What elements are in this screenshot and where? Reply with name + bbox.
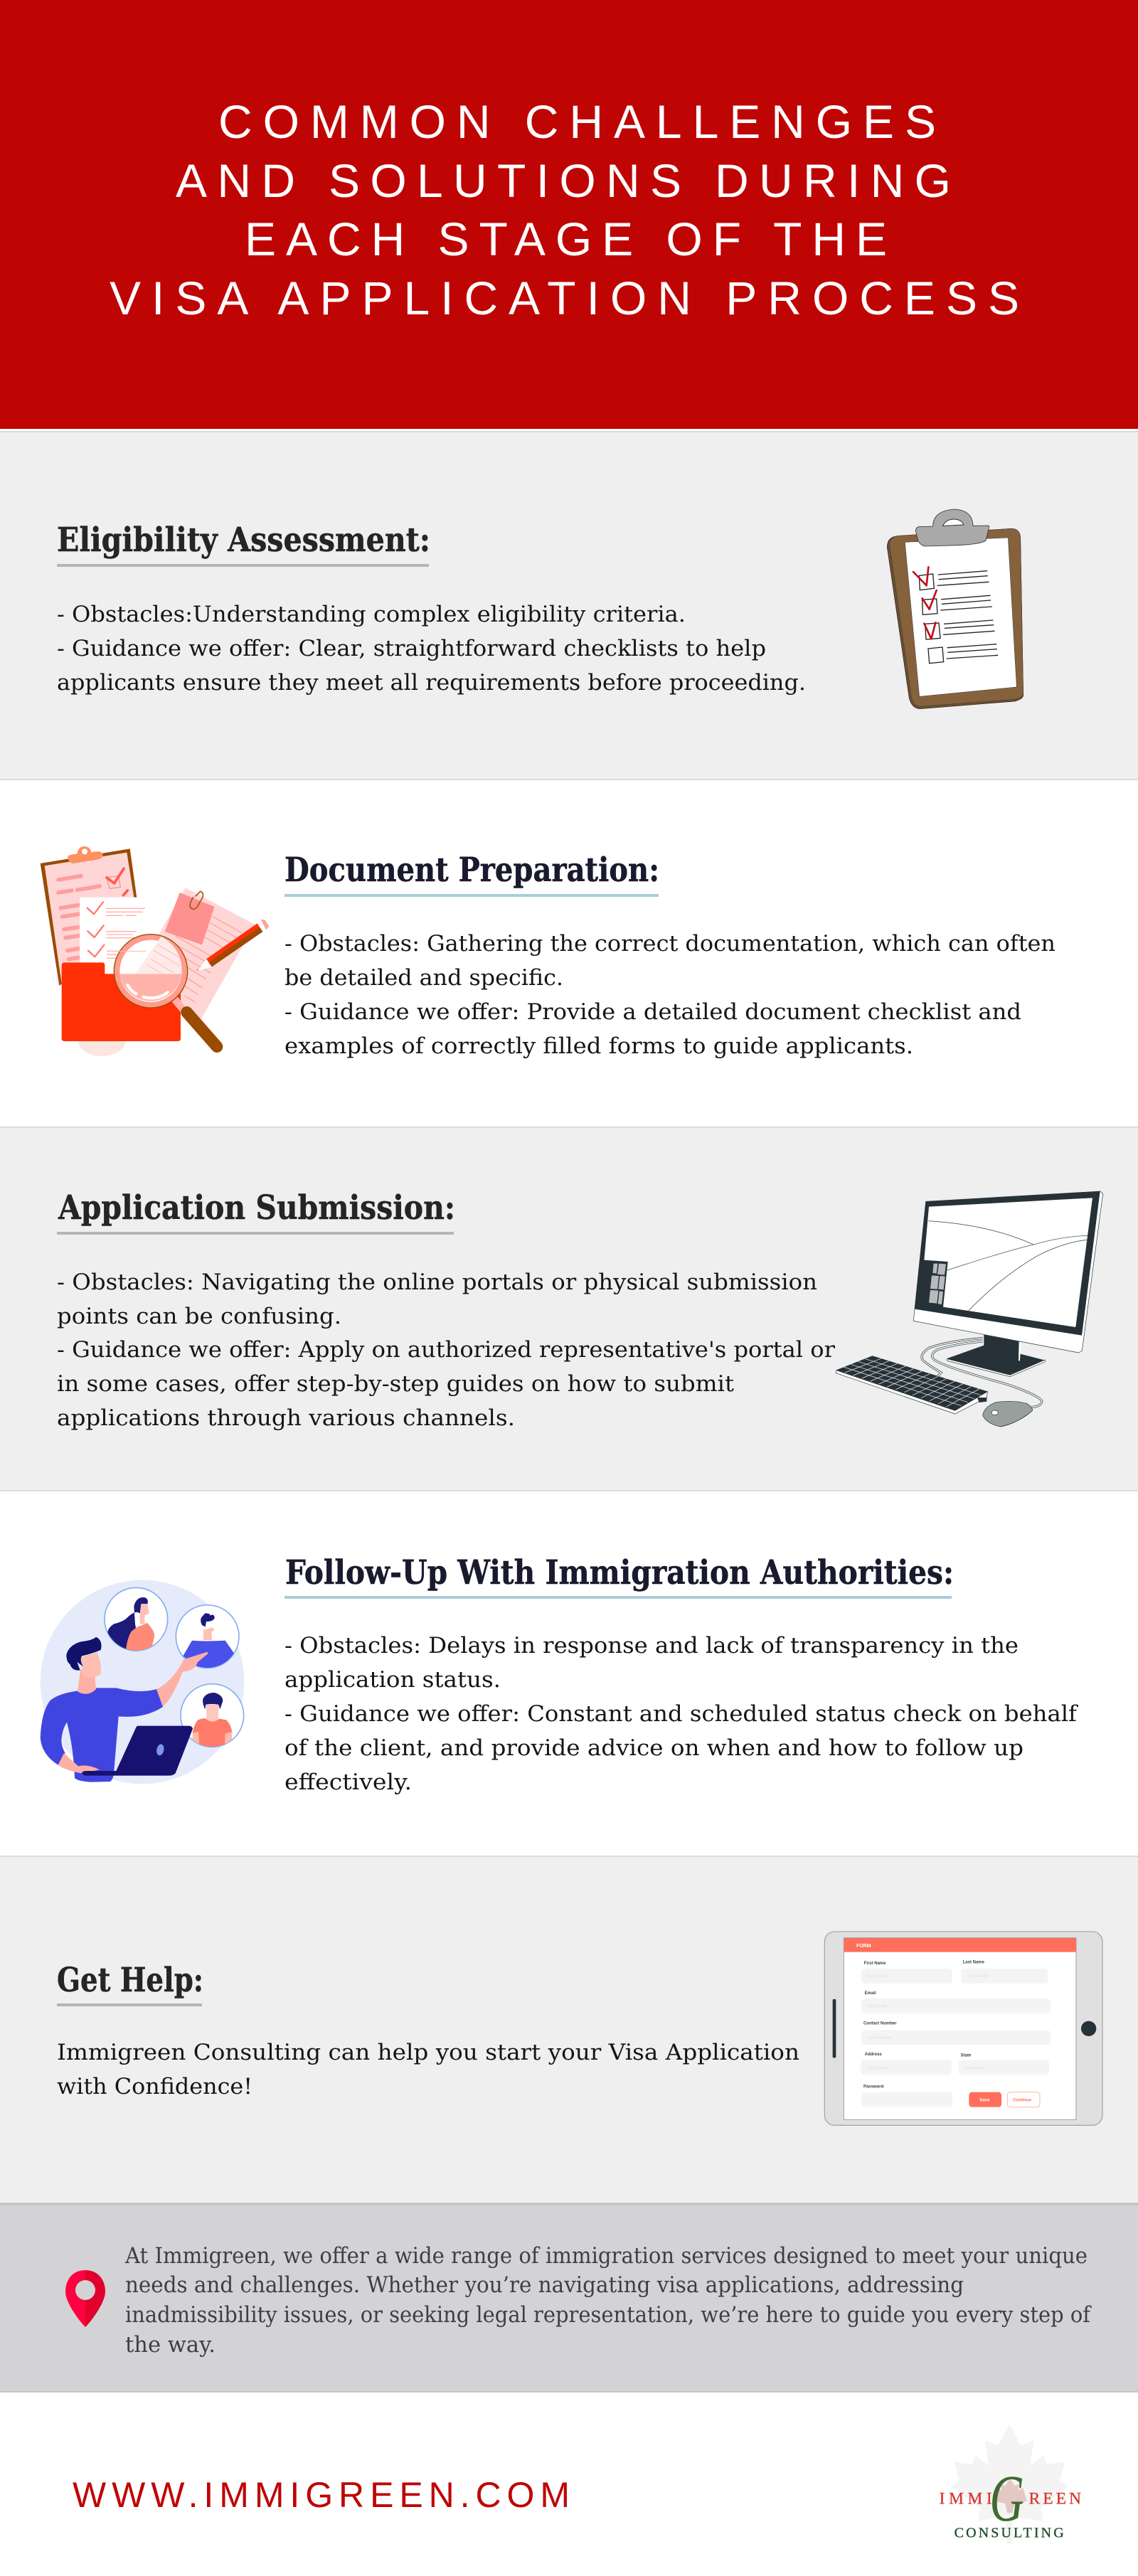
panel: document preparation bbox=[41, 846, 1055, 1059]
text block: submission obstacles and guidance bbox=[57, 1270, 835, 1431]
icon: tablet with form: First Name bbox=[864, 1962, 886, 1966]
text block: follow-up obstacles and guidance: effectively. bbox=[284, 1769, 412, 1795]
text block: submission obstacles and guidance: applications through various channels. bbox=[57, 1405, 515, 1431]
icon: tablet with form: Your Number bbox=[868, 2036, 893, 2040]
icon: location pin bbox=[65, 2270, 105, 2327]
heading: application submission: Application Submission: bbox=[58, 1188, 455, 1228]
text block: submission obstacles and guidance: - Guidance we offer: Apply on authorized representative's portal or bbox=[57, 1337, 835, 1363]
panel: follow-up with immigration authorities bbox=[41, 1553, 1079, 1795]
text block: eligibility obstacles and guidance: applicants ensure they meet all requirements before proceeding. bbox=[57, 670, 806, 696]
title: AND SOLUTIONS DURING bbox=[176, 154, 951, 207]
icon: tablet with form: Your Name bbox=[866, 1974, 888, 1979]
text block: submission obstacles and guidance: in some cases, offer step-by-step guides on how to submit bbox=[57, 1371, 735, 1397]
text block: follow-up obstacles and guidance bbox=[284, 1633, 1079, 1795]
icon: tablet with form: Password bbox=[863, 2085, 884, 2089]
text block: get help message bbox=[57, 2040, 799, 2099]
text block: document obstacles and guidance bbox=[284, 931, 1055, 1059]
title: VISA APPLICATION PROCESS bbox=[110, 272, 1019, 324]
text block: services description: the way. bbox=[125, 2332, 216, 2358]
icon: tablet with form: Last Name bbox=[963, 1961, 985, 1965]
panel: eligibility assessment bbox=[0, 431, 1138, 780]
icon: tablet with form: Contact Number bbox=[863, 2022, 897, 2026]
text block: services description: inadmissibility issues, or seeking legal representation, we’re here to guide you every step of bbox=[125, 2302, 1092, 2328]
text block: services description: At Immigreen, we offer a wide range of immigration services designed to meet your unique bbox=[124, 2243, 1088, 2269]
icon: documents, folder and magnifying glass bbox=[41, 846, 269, 1056]
icon: desktop computer, keyboard and mouse bbox=[836, 1191, 1103, 1427]
icon: tablet with form: State bbox=[961, 2054, 972, 2058]
logo: Immigreen Consulting: REEN bbox=[1029, 2490, 1081, 2508]
icon: tablet with form: Email bbox=[865, 1991, 876, 1996]
heading: eligibility assessment: Eligibility Assessment: bbox=[57, 521, 430, 560]
heading: document preparation: Document Preparation: bbox=[284, 851, 659, 890]
text block: follow-up obstacles and guidance: - Obstacles: Delays in response and lack of transparency in the bbox=[284, 1633, 1019, 1659]
text block: get help message: with Confidence! bbox=[57, 2074, 252, 2099]
text block: document obstacles and guidance: examples of correctly filled forms to guide applicants. bbox=[284, 1033, 913, 1059]
heading: get help: Get Help: bbox=[57, 1961, 203, 2000]
text block: document obstacles and guidance: be detailed and specific. bbox=[284, 965, 563, 991]
icon: tablet with form: Your Name bbox=[964, 2066, 985, 2070]
icon: tablet with form: Save bbox=[979, 2099, 990, 2103]
logo: Immigreen Consulting: IMMI bbox=[940, 2490, 992, 2508]
icon: tablet with form bbox=[824, 1932, 1102, 2125]
text block: services description: needs and challenges. Whether you’re navigating visa applications, addressing bbox=[125, 2272, 964, 2298]
icon: tablet with form: FORM bbox=[856, 1944, 871, 1949]
title: COMMON CHALLENGES bbox=[218, 95, 936, 148]
text block: services description bbox=[124, 2243, 1092, 2358]
website address: WWW.IMMIGREEN.COM bbox=[73, 2475, 570, 2515]
icon: tablet with form: Your Name bbox=[866, 2066, 888, 2070]
icon: tablet with form: Continue bbox=[1013, 2099, 1032, 2103]
logo: Immigreen Consulting: CONSULTING bbox=[954, 2525, 1064, 2540]
panel: application submission bbox=[0, 1127, 1138, 1491]
text block: document obstacles and guidance: - Obstacles: Gathering the correct documentation, which can often bbox=[284, 931, 1055, 957]
icon: person at laptop pointing to contacts bbox=[41, 1580, 244, 1784]
icon: clipboard with checklist bbox=[887, 509, 1023, 709]
icon: tablet with form: Your Name bbox=[967, 1974, 988, 1979]
panel: title banner bbox=[0, 0, 1138, 429]
icon: tablet with form: Address bbox=[865, 2053, 882, 2057]
text block: document obstacles and guidance: - Guidance we offer: Provide a detailed document checklist and bbox=[284, 999, 1021, 1025]
text block: submission obstacles and guidance: - Obstacles: Navigating the online portals or physical submission bbox=[57, 1270, 817, 1295]
text block: eligibility obstacles and guidance bbox=[57, 602, 806, 696]
heading: follow-up with immigration authorities: Follow-Up With Immigration Authorities: bbox=[285, 1553, 954, 1592]
text block: submission obstacles and guidance: points can be confusing. bbox=[57, 1304, 341, 1329]
logo: Immigreen Consulting bbox=[940, 2424, 1081, 2544]
title bbox=[110, 95, 1019, 324]
title: EACH STAGE OF THE bbox=[245, 213, 887, 265]
text block: follow-up obstacles and guidance: of the client, and provide advice on when and how to follow up bbox=[284, 1735, 1023, 1761]
panel: get help bbox=[0, 1856, 1138, 2203]
text block: eligibility obstacles and guidance: - Obstacles:Understanding complex eligibility criteria. bbox=[57, 602, 686, 627]
logo: Immigreen Consulting: G bbox=[989, 2461, 1024, 2535]
text block: follow-up obstacles and guidance: application status. bbox=[284, 1667, 501, 1693]
icon: tablet with form: Your Email bbox=[866, 2005, 887, 2009]
text block: follow-up obstacles and guidance: - Guidance we offer: Constant and scheduled status check on behalf bbox=[284, 1701, 1079, 1727]
panel: services note bbox=[0, 2203, 1138, 2393]
text block: eligibility obstacles and guidance: - Guidance we offer: Clear, straightforward checklists to help bbox=[57, 636, 766, 661]
text block: get help message: Immigreen Consulting can help you start your Visa Application bbox=[57, 2040, 799, 2065]
